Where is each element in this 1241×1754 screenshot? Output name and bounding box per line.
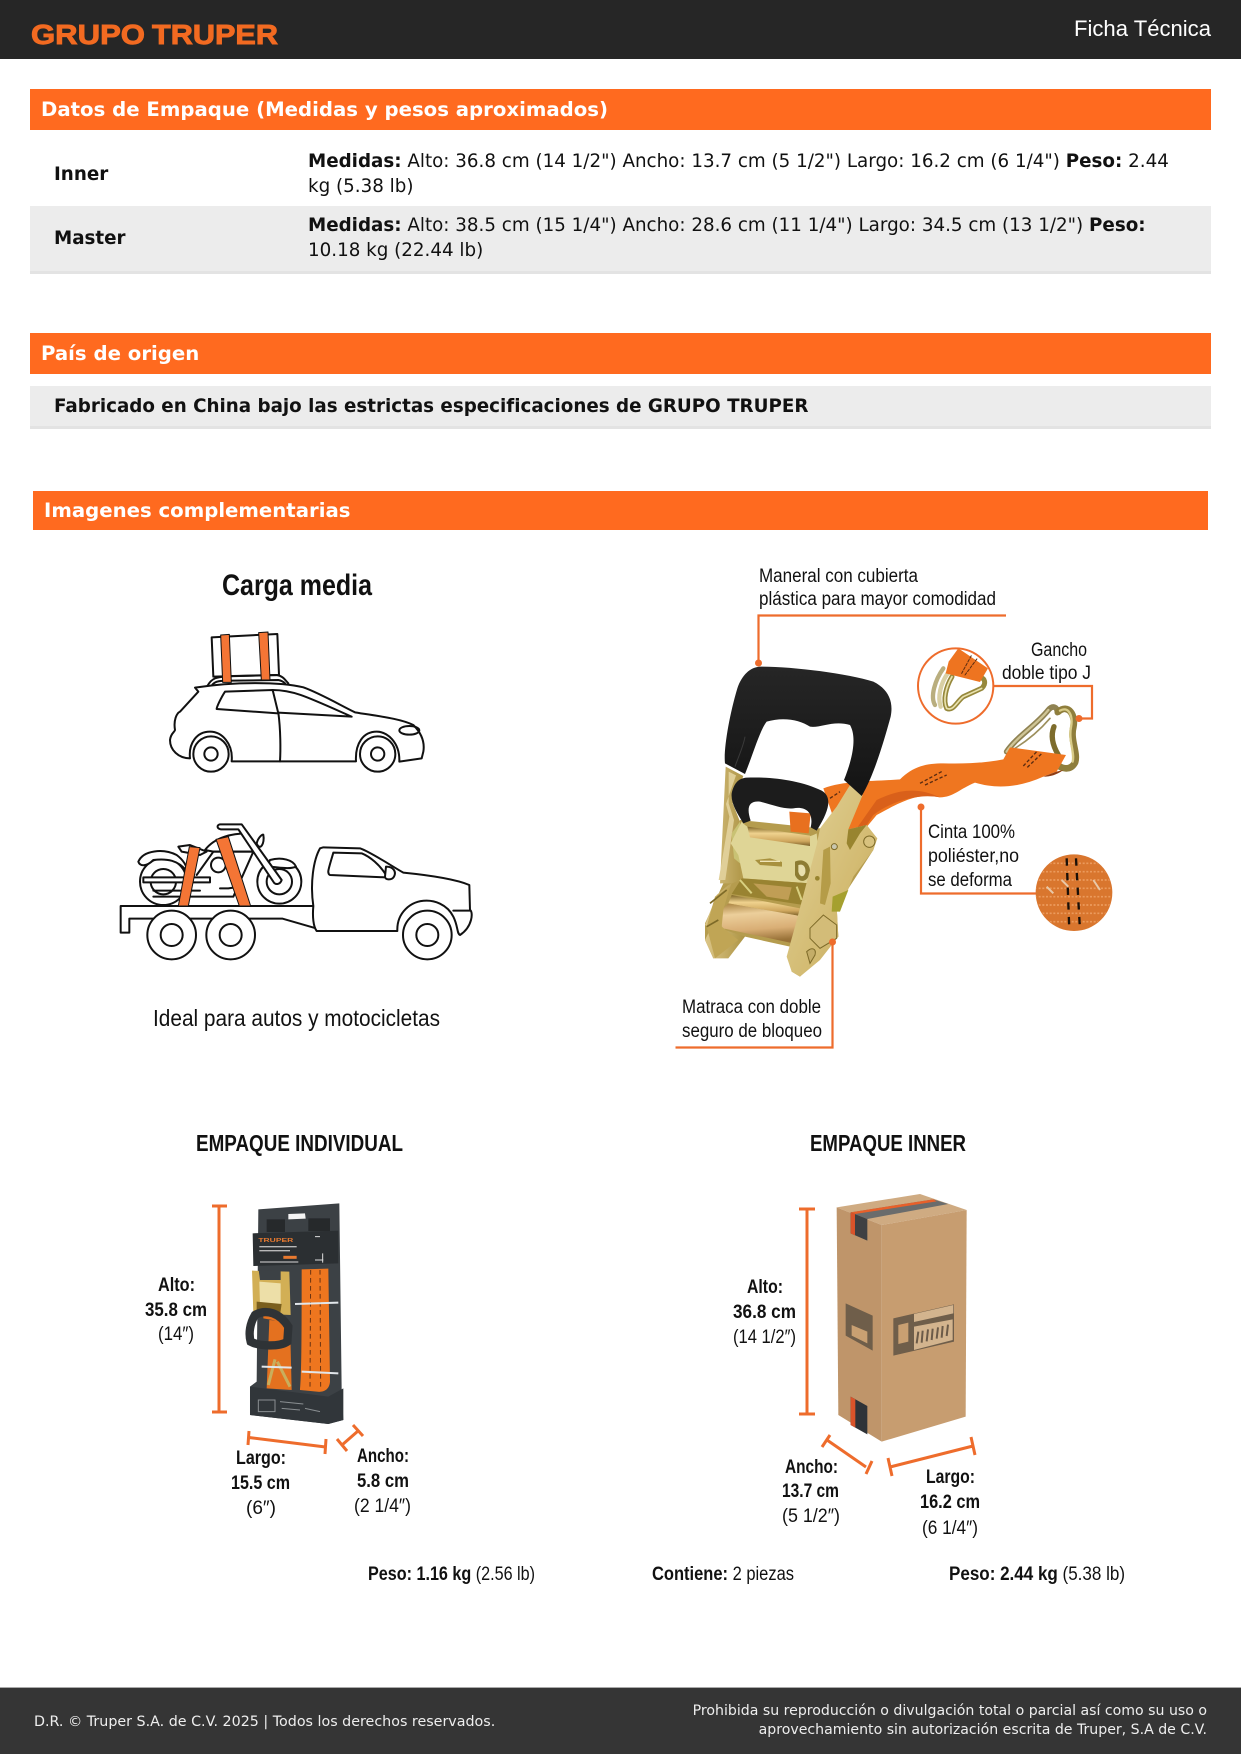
icon: car with roof load strapped (170, 632, 424, 772)
dimension: ancho individual: Ancho: (357, 1446, 409, 1467)
detail circle: double J hook (918, 648, 993, 724)
dimension: ancho inner: 13.7 cm (782, 1481, 839, 1502)
footer (0, 1687, 1241, 1754)
upper roller (747, 827, 810, 846)
logo: Grupo Truper: GRUPO (31, 19, 145, 50)
footer: legal notice: Prohibida su reproducción o divulgación total o parcial así como su uso o (693, 1703, 1207, 1719)
centre plate (731, 822, 819, 883)
heading: Empaque individual: EMPAQUE INDIVIDUAL (196, 1130, 403, 1156)
footer: copyright: D.R. © Truper S.A. de C.V. 2025 | Todos los derechos reservados. (34, 1714, 495, 1730)
callout: cinta 100% poliéster: Cinta 100% (928, 822, 1015, 843)
callout: gancho doble tipo J: Gancho (1031, 640, 1087, 661)
callout: cinta 100% poliéster: se deforma (928, 870, 1012, 891)
dimension: largo individual (231, 1431, 326, 1519)
dimension: ancho inner: Ancho: (785, 1457, 838, 1478)
dimension: largo inner (888, 1437, 980, 1539)
callout: gancho doble tipo J: doble tipo J (1002, 663, 1091, 684)
detail circle: webbing texture (1035, 854, 1113, 931)
dimension: alto inner (733, 1209, 815, 1414)
footer: legal notice: aprovechamiento sin autorización escrita de Truper, S.A de C.V. (759, 1722, 1207, 1738)
contents: inner pack: Contiene: 2 piezas (652, 1564, 794, 1585)
dimension: ancho individual (337, 1425, 411, 1517)
dimension: alto individual: 35.8 cm (145, 1300, 207, 1321)
table row: Inner (54, 151, 1169, 197)
section heading: Datos de Empaque (30, 89, 1211, 130)
section heading: Imagenes complementarias (33, 491, 1208, 530)
section heading: País de origen (30, 333, 1211, 374)
origin statement: Fabricado en China bajo las estrictas especificaciones de GRUPO TRUPER (54, 396, 808, 417)
icon: pickup towing motorcycle on flatbed (121, 824, 472, 959)
photo: inner carton box (837, 1194, 967, 1442)
metal base (705, 820, 877, 977)
dimension: largo inner: Largo: (926, 1467, 975, 1488)
dimension: alto individual: (14″) (158, 1324, 194, 1345)
dimension: alto inner: Alto: (747, 1277, 783, 1298)
row values: Inner: kg (5.38 lb) (308, 176, 413, 197)
callout: maneral: Maneral con cubierta (759, 566, 918, 587)
dimension: largo individual: Largo: (236, 1448, 286, 1469)
footer: legal notice (693, 1703, 1207, 1738)
callout: matraca con doble seguro: Matraca con doble (682, 997, 821, 1018)
left side plate (705, 767, 745, 958)
photo: individual blister pack (250, 1203, 343, 1424)
origin statement (30, 386, 1211, 429)
webbing strap (823, 747, 1066, 847)
dimension: ancho inner (782, 1435, 872, 1527)
callout: maneral: plástica para mayor comodidad (759, 589, 996, 610)
logo: Grupo Truper (31, 19, 278, 50)
lower bars and roller (732, 878, 810, 905)
photo: individual blister pack: TRUPER (258, 1238, 293, 1244)
callout: gancho doble tipo J (994, 640, 1092, 722)
dimension: ancho inner: (5 1/2″) (782, 1506, 840, 1527)
right side plate (787, 785, 877, 977)
heading: Carga media: Carga media (222, 569, 372, 602)
dimension: largo individual: (6″) (246, 1498, 276, 1519)
dimension: alto inner: 36.8 cm (733, 1302, 796, 1323)
dimension: ancho individual: (2 1/4″) (354, 1496, 411, 1517)
row label: Master: Master (54, 228, 126, 249)
row values: Master (308, 215, 1146, 261)
header bar (0, 0, 1241, 59)
callout: cinta 100% poliéster: poliéster,no (928, 846, 1019, 867)
dimension: largo inner: 16.2 cm (920, 1492, 980, 1513)
section heading: Imagenes complementarias: Imagenes complementarias (44, 499, 350, 522)
weight: inner pack: Peso: 2.44 kg (5.38 lb) (949, 1564, 1125, 1585)
section heading: Datos de Empaque: Datos de Empaque (Medidas y pesos aproximados) (41, 98, 608, 121)
dimension: alto inner: (14 1/2″) (733, 1327, 796, 1348)
row values: Master: Medidas: Alto: 38.5 cm (15 1/4") Ancho: 28.6 cm (11 1/4") Largo: 34.5 cm (13 1/2") Peso: (308, 215, 1146, 236)
row label: Inner: Inner (54, 164, 108, 185)
black padded handle (725, 667, 891, 796)
callout: matraca con doble seguro (676, 938, 836, 1048)
photo: ratchet strap product (705, 667, 1076, 977)
dimension: ancho individual: 5.8 cm (357, 1471, 409, 1492)
dimension: alto individual: Alto: (158, 1275, 195, 1296)
section heading: País de origen: País de origen (41, 342, 199, 365)
callout: matraca con doble seguro: seguro de bloqueo (682, 1021, 822, 1042)
row values: Master: 10.18 kg (22.44 lb) (308, 240, 483, 261)
row values: Inner (308, 151, 1169, 197)
logo: Grupo Truper: TRUPER (152, 19, 278, 50)
J hook (1007, 707, 1076, 768)
callout: maneral (755, 566, 1006, 666)
dimension: alto individual (145, 1206, 227, 1412)
callout: cinta 100% poliéster (918, 804, 1036, 894)
document title: Ficha Técnica: Ficha Técnica (1074, 16, 1212, 41)
caption: Ideal para autos y motocicletas: Ideal para autos y motocicletas (153, 1005, 440, 1031)
table row: Master (30, 206, 1211, 274)
heading: Empaque inner: EMPAQUE INNER (810, 1130, 966, 1156)
weight: individual pack: Peso: 1.16 kg (2.56 lb) (368, 1564, 535, 1585)
dimension: largo inner: (6 1/4″) (922, 1518, 978, 1539)
small release lever (732, 777, 828, 831)
row values: Inner: Medidas: Alto: 36.8 cm (14 1/2") Ancho: 13.7 cm (5 1/2") Largo: 16.2 cm (6 1/4") Peso: 2.44 (308, 151, 1169, 172)
dimension: largo individual: 15.5 cm (231, 1473, 290, 1494)
